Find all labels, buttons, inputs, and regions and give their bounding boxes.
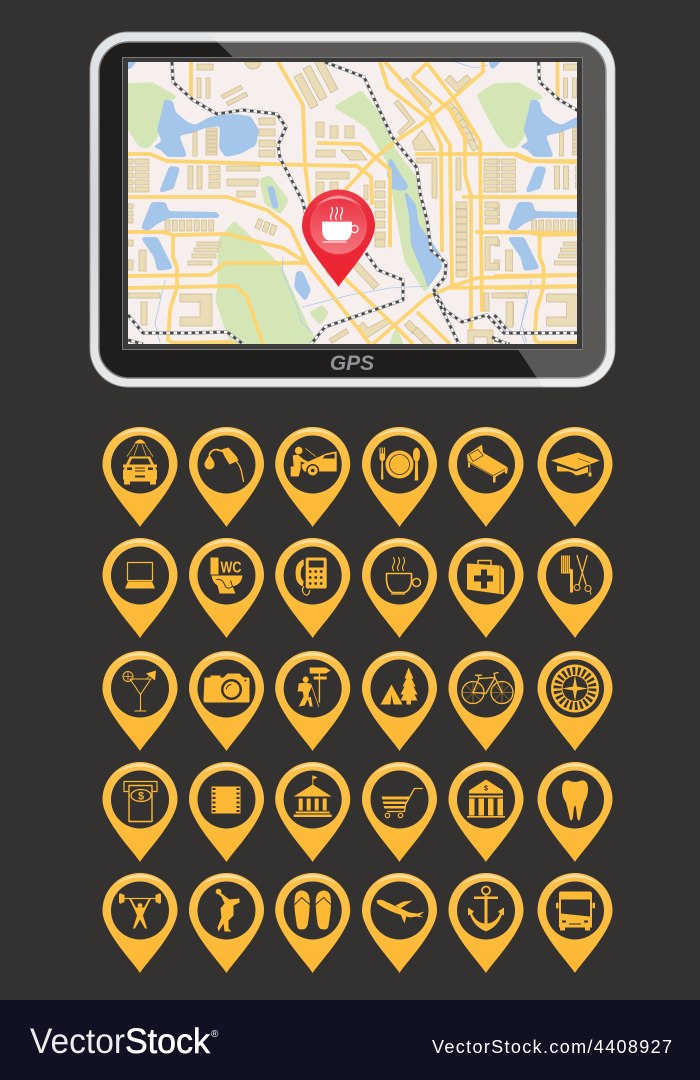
device dark bezel — [99, 42, 606, 378]
pin: bank: $ — [484, 786, 488, 792]
pin: discus thrower — [189, 873, 264, 973]
pin: bank — [448, 762, 524, 862]
bezel gloss — [208, 33, 615, 387]
pin: ATM cash: $ — [138, 790, 144, 802]
pin: bus — [538, 873, 612, 973]
pin: comb and scissors — [538, 538, 612, 638]
pin: WC toilet: WC — [220, 560, 242, 576]
pin: telephone — [275, 538, 350, 638]
pin: museum — [275, 762, 350, 862]
pin: restaurant plate — [362, 427, 437, 527]
watermark footer bar — [0, 1000, 700, 1080]
pin: cocktail — [102, 651, 178, 751]
pin: weightlifter — [102, 873, 178, 973]
map — [128, 62, 577, 344]
device silver frame — [90, 32, 615, 387]
VectorStock logo — [30, 1022, 219, 1061]
pin: bicycle — [448, 651, 524, 751]
red map pin with coffee cup — [302, 190, 375, 287]
pin: hiker with signpost — [275, 651, 350, 751]
pin: car mechanic — [275, 427, 350, 527]
pin: tent and tree — [362, 651, 437, 751]
pin: anchor — [448, 873, 524, 973]
pin: fuel nozzle — [189, 427, 264, 527]
pin: film strip — [189, 762, 264, 862]
GPS label: GPS — [330, 352, 374, 375]
pin: graduation cap — [538, 427, 612, 527]
pin: camera — [189, 651, 264, 751]
pin: laptop — [102, 538, 178, 638]
pin: tooth — [538, 762, 612, 862]
pin: WC toilet — [189, 538, 264, 638]
pin: airplane — [362, 873, 437, 973]
VectorStock logo: ® — [211, 1029, 219, 1040]
VectorStock logo: Stock — [125, 1022, 210, 1061]
VectorStock logo: Vector — [30, 1022, 125, 1061]
pin: shopping cart — [362, 762, 437, 862]
pin: car wash — [102, 427, 178, 527]
pin: coffee cup — [362, 538, 437, 638]
GPS device — [90, 32, 616, 388]
pin: flip flops — [275, 873, 350, 973]
pin: first aid kit — [448, 538, 524, 638]
pin: roulette wheel — [538, 651, 612, 751]
screen frame — [122, 58, 582, 350]
pin: ATM cash — [102, 762, 178, 862]
VectorStock URL: VectorStock.com/4408927 — [432, 1037, 672, 1057]
pin: bed — [448, 427, 524, 527]
